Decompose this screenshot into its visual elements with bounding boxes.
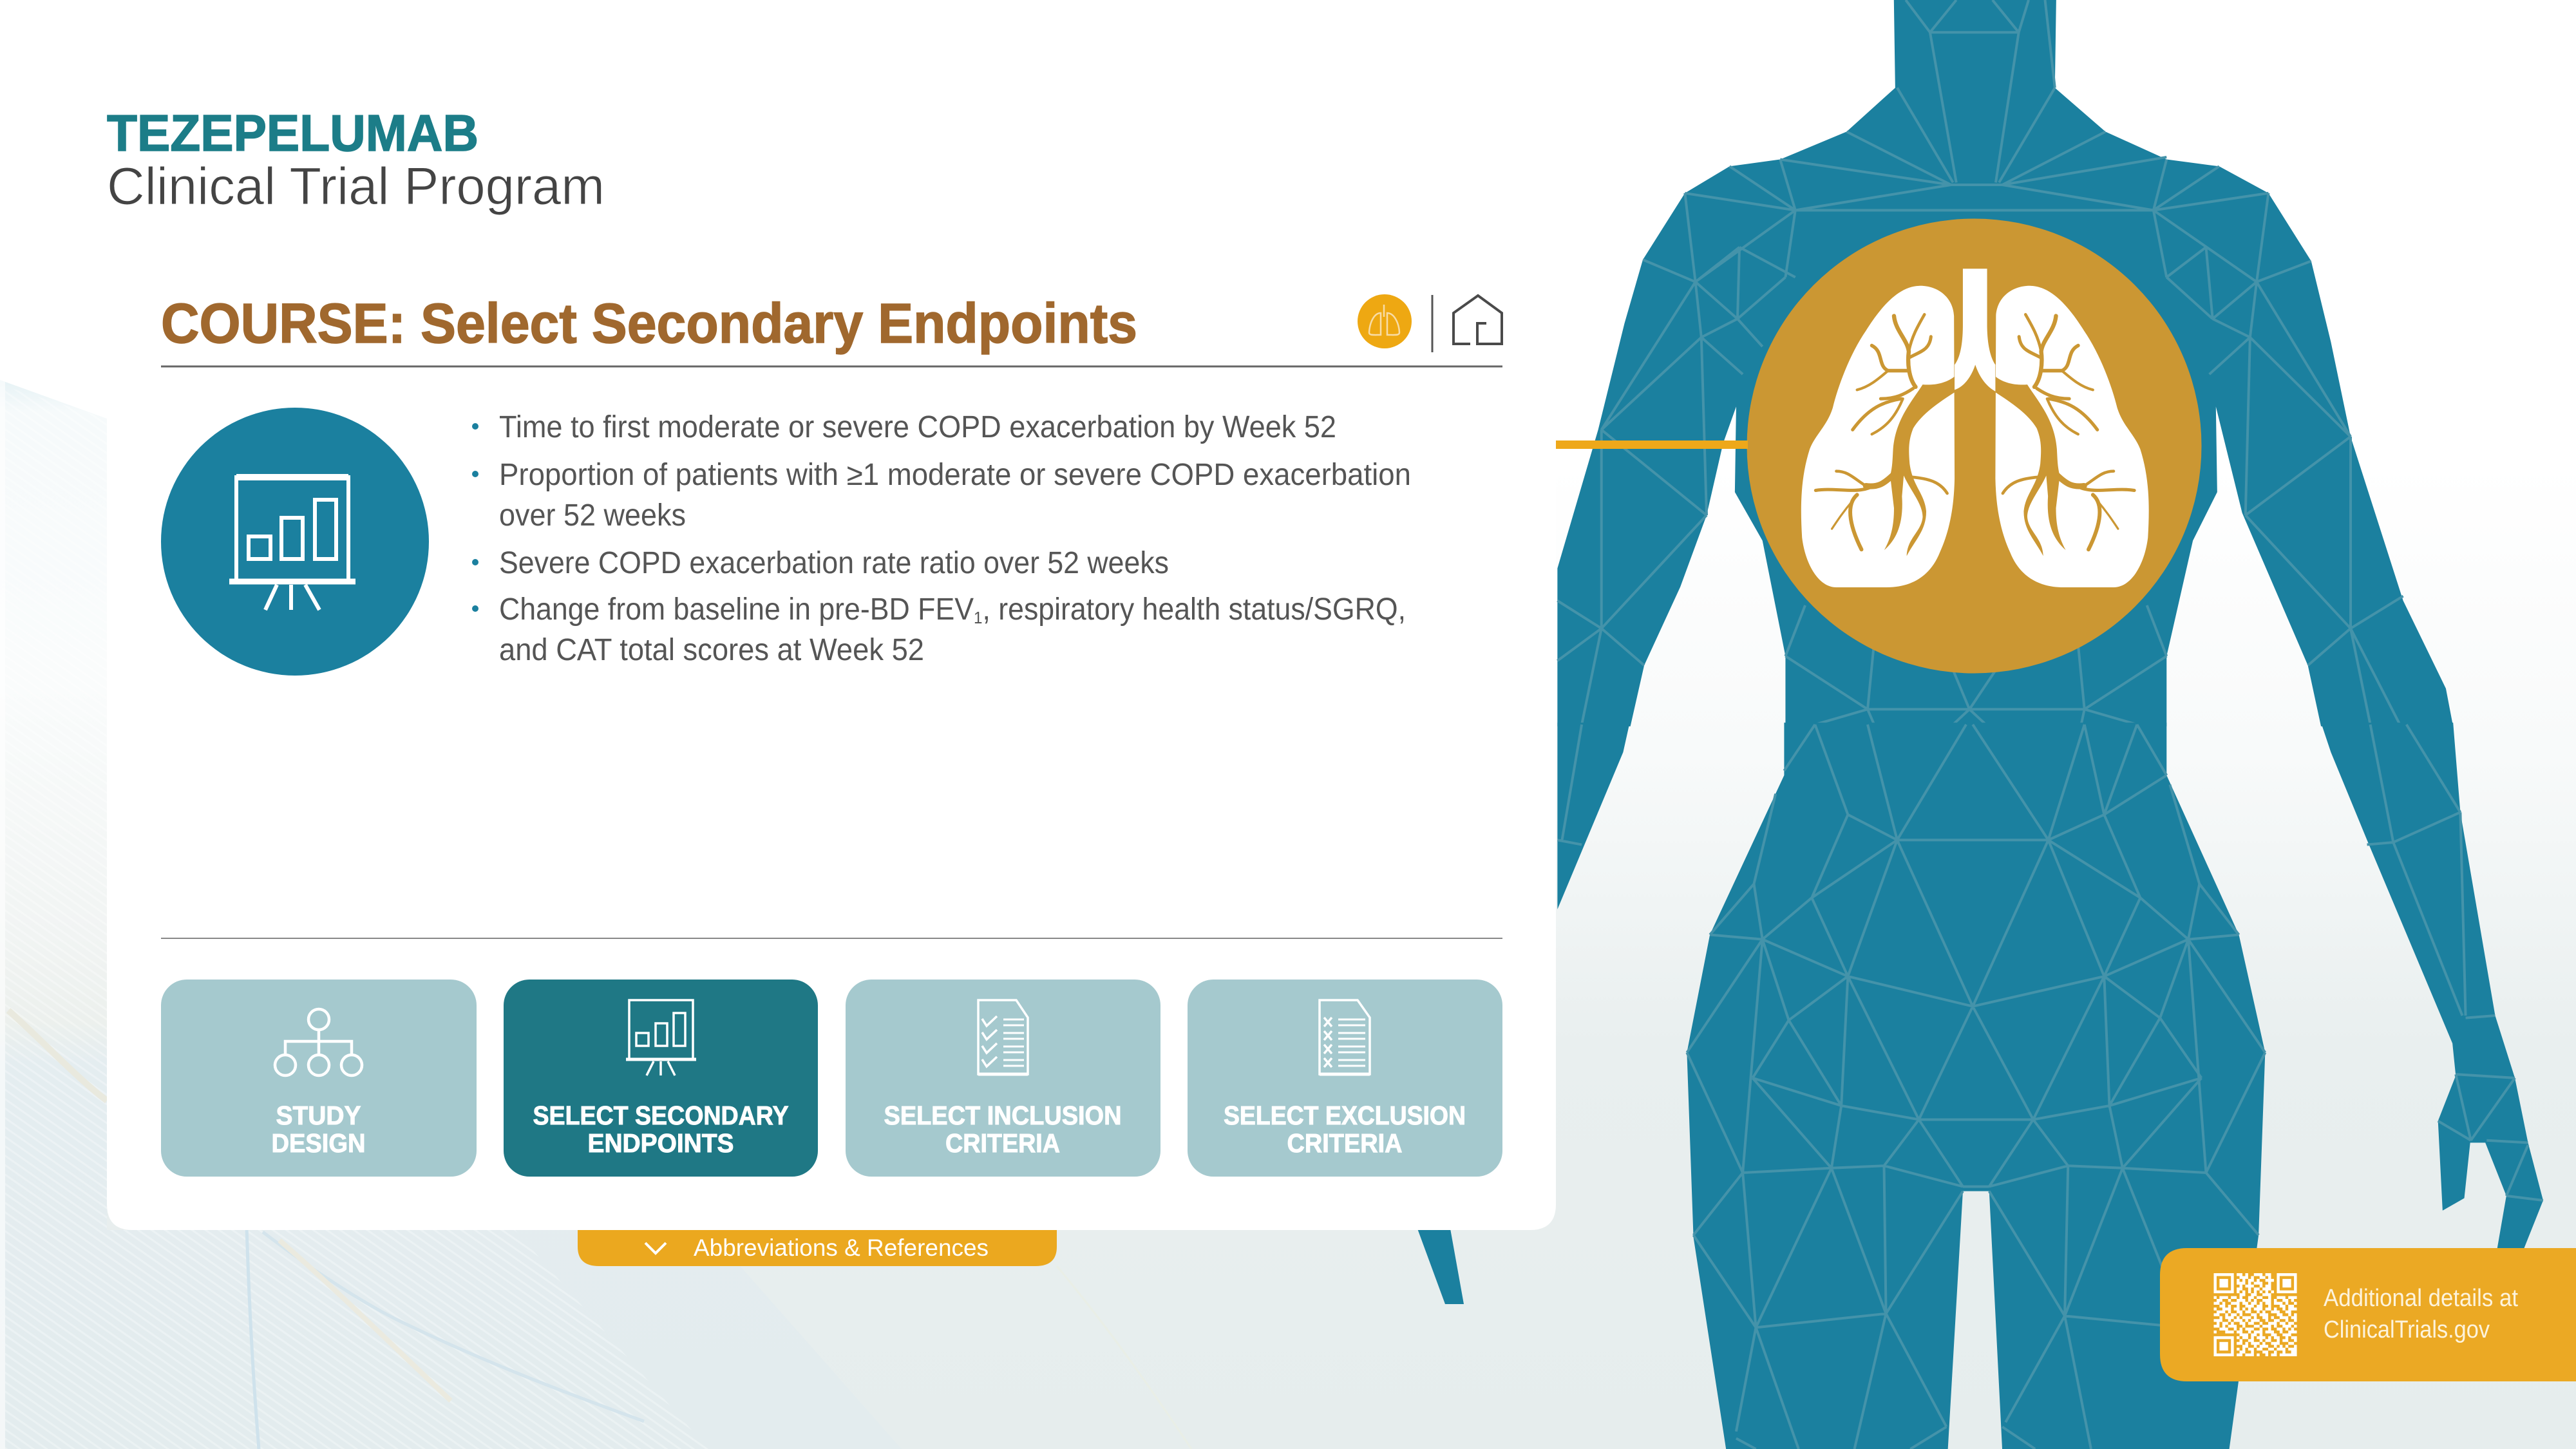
- icon: trachea: [1955, 269, 1995, 392]
- body silhouette: upper: [1557, 0, 2453, 726]
- bullet: severe rate ratio: Severe COPD exacerbation rate ratio over 52 weeks: [499, 546, 1169, 580]
- bullet: change from baseline: Change from baseline in pre-BD FEV: [499, 592, 1009, 627]
- QR code: [2214, 1274, 2297, 1355]
- icon: lung badge: [1358, 294, 1412, 348]
- icon: chevron: [645, 1243, 666, 1253]
- icon: presentation board in teal circle: [161, 408, 429, 676]
- references tab: [578, 1227, 1057, 1266]
- endpoints list: [472, 410, 1411, 667]
- button: select inclusion criteria: CRITERIA: [945, 1128, 1060, 1158]
- title: [107, 104, 605, 216]
- icon: left lung: [1801, 286, 1956, 587]
- divider between icons: [1431, 295, 1434, 352]
- navigation buttons: [161, 980, 1502, 1177]
- button: select inclusion criteria: [846, 980, 1160, 1177]
- button: select exclusion criteria: [1188, 980, 1502, 1177]
- lung circle with lungs: [1747, 219, 2201, 674]
- bullet: proportion of patients: [472, 458, 1411, 533]
- icon: right lung: [1994, 286, 2149, 587]
- callout text: Additional details at: [2324, 1285, 2518, 1312]
- title: TEZEPELUMAB: [107, 104, 478, 162]
- icon: cross-list document: [1320, 1000, 1370, 1074]
- button: select secondary endpoints: SELECT SECONDARY: [533, 1101, 788, 1130]
- button: select exclusion criteria: SELECT EXCLUSION: [1224, 1101, 1466, 1130]
- callout: ClinicalTrials.gov: [2160, 1248, 2576, 1381]
- bullet: change from baseline: and CAT total scores at Week 52: [499, 633, 924, 667]
- body silhouette: lower: [1557, 723, 2543, 1449]
- button: select secondary endpoints: [504, 980, 818, 1177]
- button: study design: STUDY: [276, 1101, 361, 1130]
- button: study design: [161, 980, 477, 1177]
- bullet: change from baseline: , respiratory health status/SGRQ,: [982, 592, 1406, 627]
- left hand fragment: [1417, 1229, 1464, 1304]
- icon: checklist document: [978, 1000, 1028, 1074]
- bullet: first moderate or severe exacerbation: Time to first moderate or severe COPD exacerbation by Week 52: [499, 410, 1336, 444]
- human body figure: [1557, 0, 2543, 1449]
- white content panel: [107, 258, 1556, 1230]
- bullet: change from baseline: [472, 592, 1406, 667]
- connector bar: [1556, 440, 1748, 449]
- tab label: Abbreviations & References: [694, 1235, 989, 1261]
- icon: org chart: [275, 1009, 362, 1075]
- callout: ClinicalTrials.gov: ClinicalTrials.gov: [2324, 1316, 2490, 1343]
- bullet: proportion of patients: over 52 weeks: [499, 498, 686, 533]
- title: Clinical Trial Program: [107, 157, 605, 216]
- icon: home: [1454, 296, 1502, 344]
- bullet: proportion of patients: Proportion of patients with ≥1 moderate or severe COPD exacerbation: [499, 458, 1411, 492]
- button: study design: DESIGN: [272, 1128, 366, 1158]
- bullet: change from baseline: 1: [974, 608, 982, 627]
- button: select exclusion criteria: CRITERIA: [1287, 1128, 1403, 1158]
- section heading: COURSE: Select Secondary Endpoints: [161, 292, 1137, 355]
- icon: presentation board: [626, 1000, 696, 1075]
- button: select secondary endpoints: ENDPOINTS: [587, 1128, 734, 1158]
- button: select inclusion criteria: SELECT INCLUSION: [884, 1101, 1122, 1130]
